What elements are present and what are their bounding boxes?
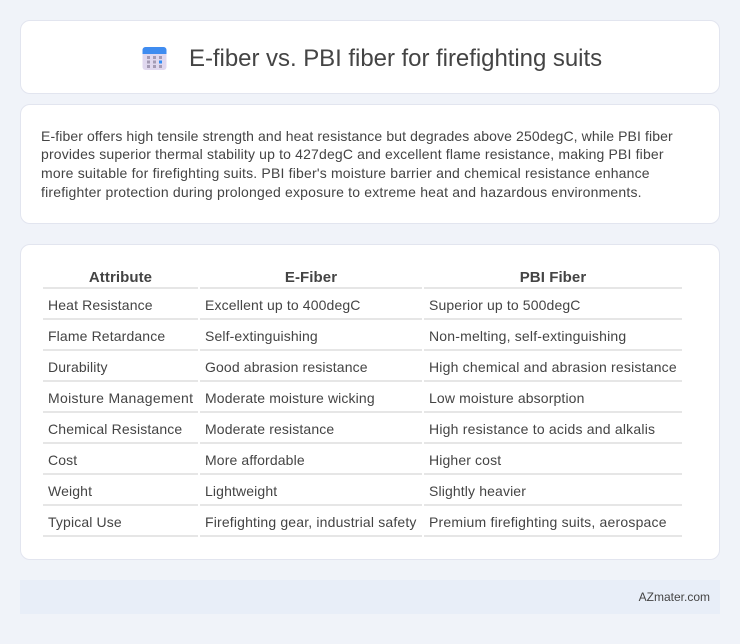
panel: comparison table <box>20 244 720 560</box>
table rows: Non-melting, self-extinguishing <box>429 328 626 344</box>
table rows: Chemical Resistance <box>48 421 182 437</box>
table rows: High resistance to acids and alkalis <box>429 421 655 437</box>
title: E-fiber vs. PBI fiber for firefighting suits <box>189 45 602 72</box>
table rows: Moderate moisture wicking <box>205 390 375 406</box>
table rows: More affordable <box>205 452 305 468</box>
table rows: Firefighting gear, industrial safety <box>205 514 417 530</box>
table rows: Flame Retardance <box>48 328 165 344</box>
table rows: Self-extinguishing <box>205 328 318 344</box>
table rows: Excellent up to 400degC <box>205 297 361 313</box>
table rows: High chemical and abrasion resistance <box>429 359 677 375</box>
table rows: Low moisture absorption <box>429 390 585 406</box>
table header: E-Fiber <box>285 269 337 286</box>
table rows: Good abrasion resistance <box>205 359 368 375</box>
table rows: Typical Use <box>48 514 122 530</box>
summary text: more suitable for firefighting suits. PBI fiber's moisture barrier and chemical resistance enhance <box>41 165 650 181</box>
table rows: Cost <box>48 452 77 468</box>
summary text: firefighter protection during prolonged exposure to extreme heat and hazardous environments. <box>41 184 642 200</box>
summary text: E-fiber offers high tensile strength and heat resistance but degrades above 250degC, while PBI fiber <box>41 128 673 144</box>
table rows: Slightly heavier <box>429 483 526 499</box>
summary text <box>41 128 673 200</box>
table header: PBI Fiber <box>520 269 586 286</box>
table rows <box>43 287 682 537</box>
table rows: Lightweight <box>205 483 277 499</box>
footer bar <box>20 580 720 614</box>
table rows: Heat Resistance <box>48 297 153 313</box>
panel: summary <box>20 104 720 224</box>
table rows: Weight <box>48 483 92 499</box>
table rows: Moderate resistance <box>205 421 334 437</box>
table header: Attribute <box>89 269 152 286</box>
table rows: Moisture Management <box>48 390 193 406</box>
icon: calendar <box>142 47 166 70</box>
footer credit: AZmater.com <box>639 590 710 604</box>
table rows: Durability <box>48 359 108 375</box>
summary text: provides superior thermal stability up to 427degC and excellent flame resistance, making PBI fiber <box>41 146 664 162</box>
panel: title card <box>20 20 720 94</box>
table rows: Superior up to 500degC <box>429 297 581 313</box>
table rows: Higher cost <box>429 452 501 468</box>
table header <box>89 269 586 286</box>
table rows: Premium firefighting suits, aerospace <box>429 514 667 530</box>
